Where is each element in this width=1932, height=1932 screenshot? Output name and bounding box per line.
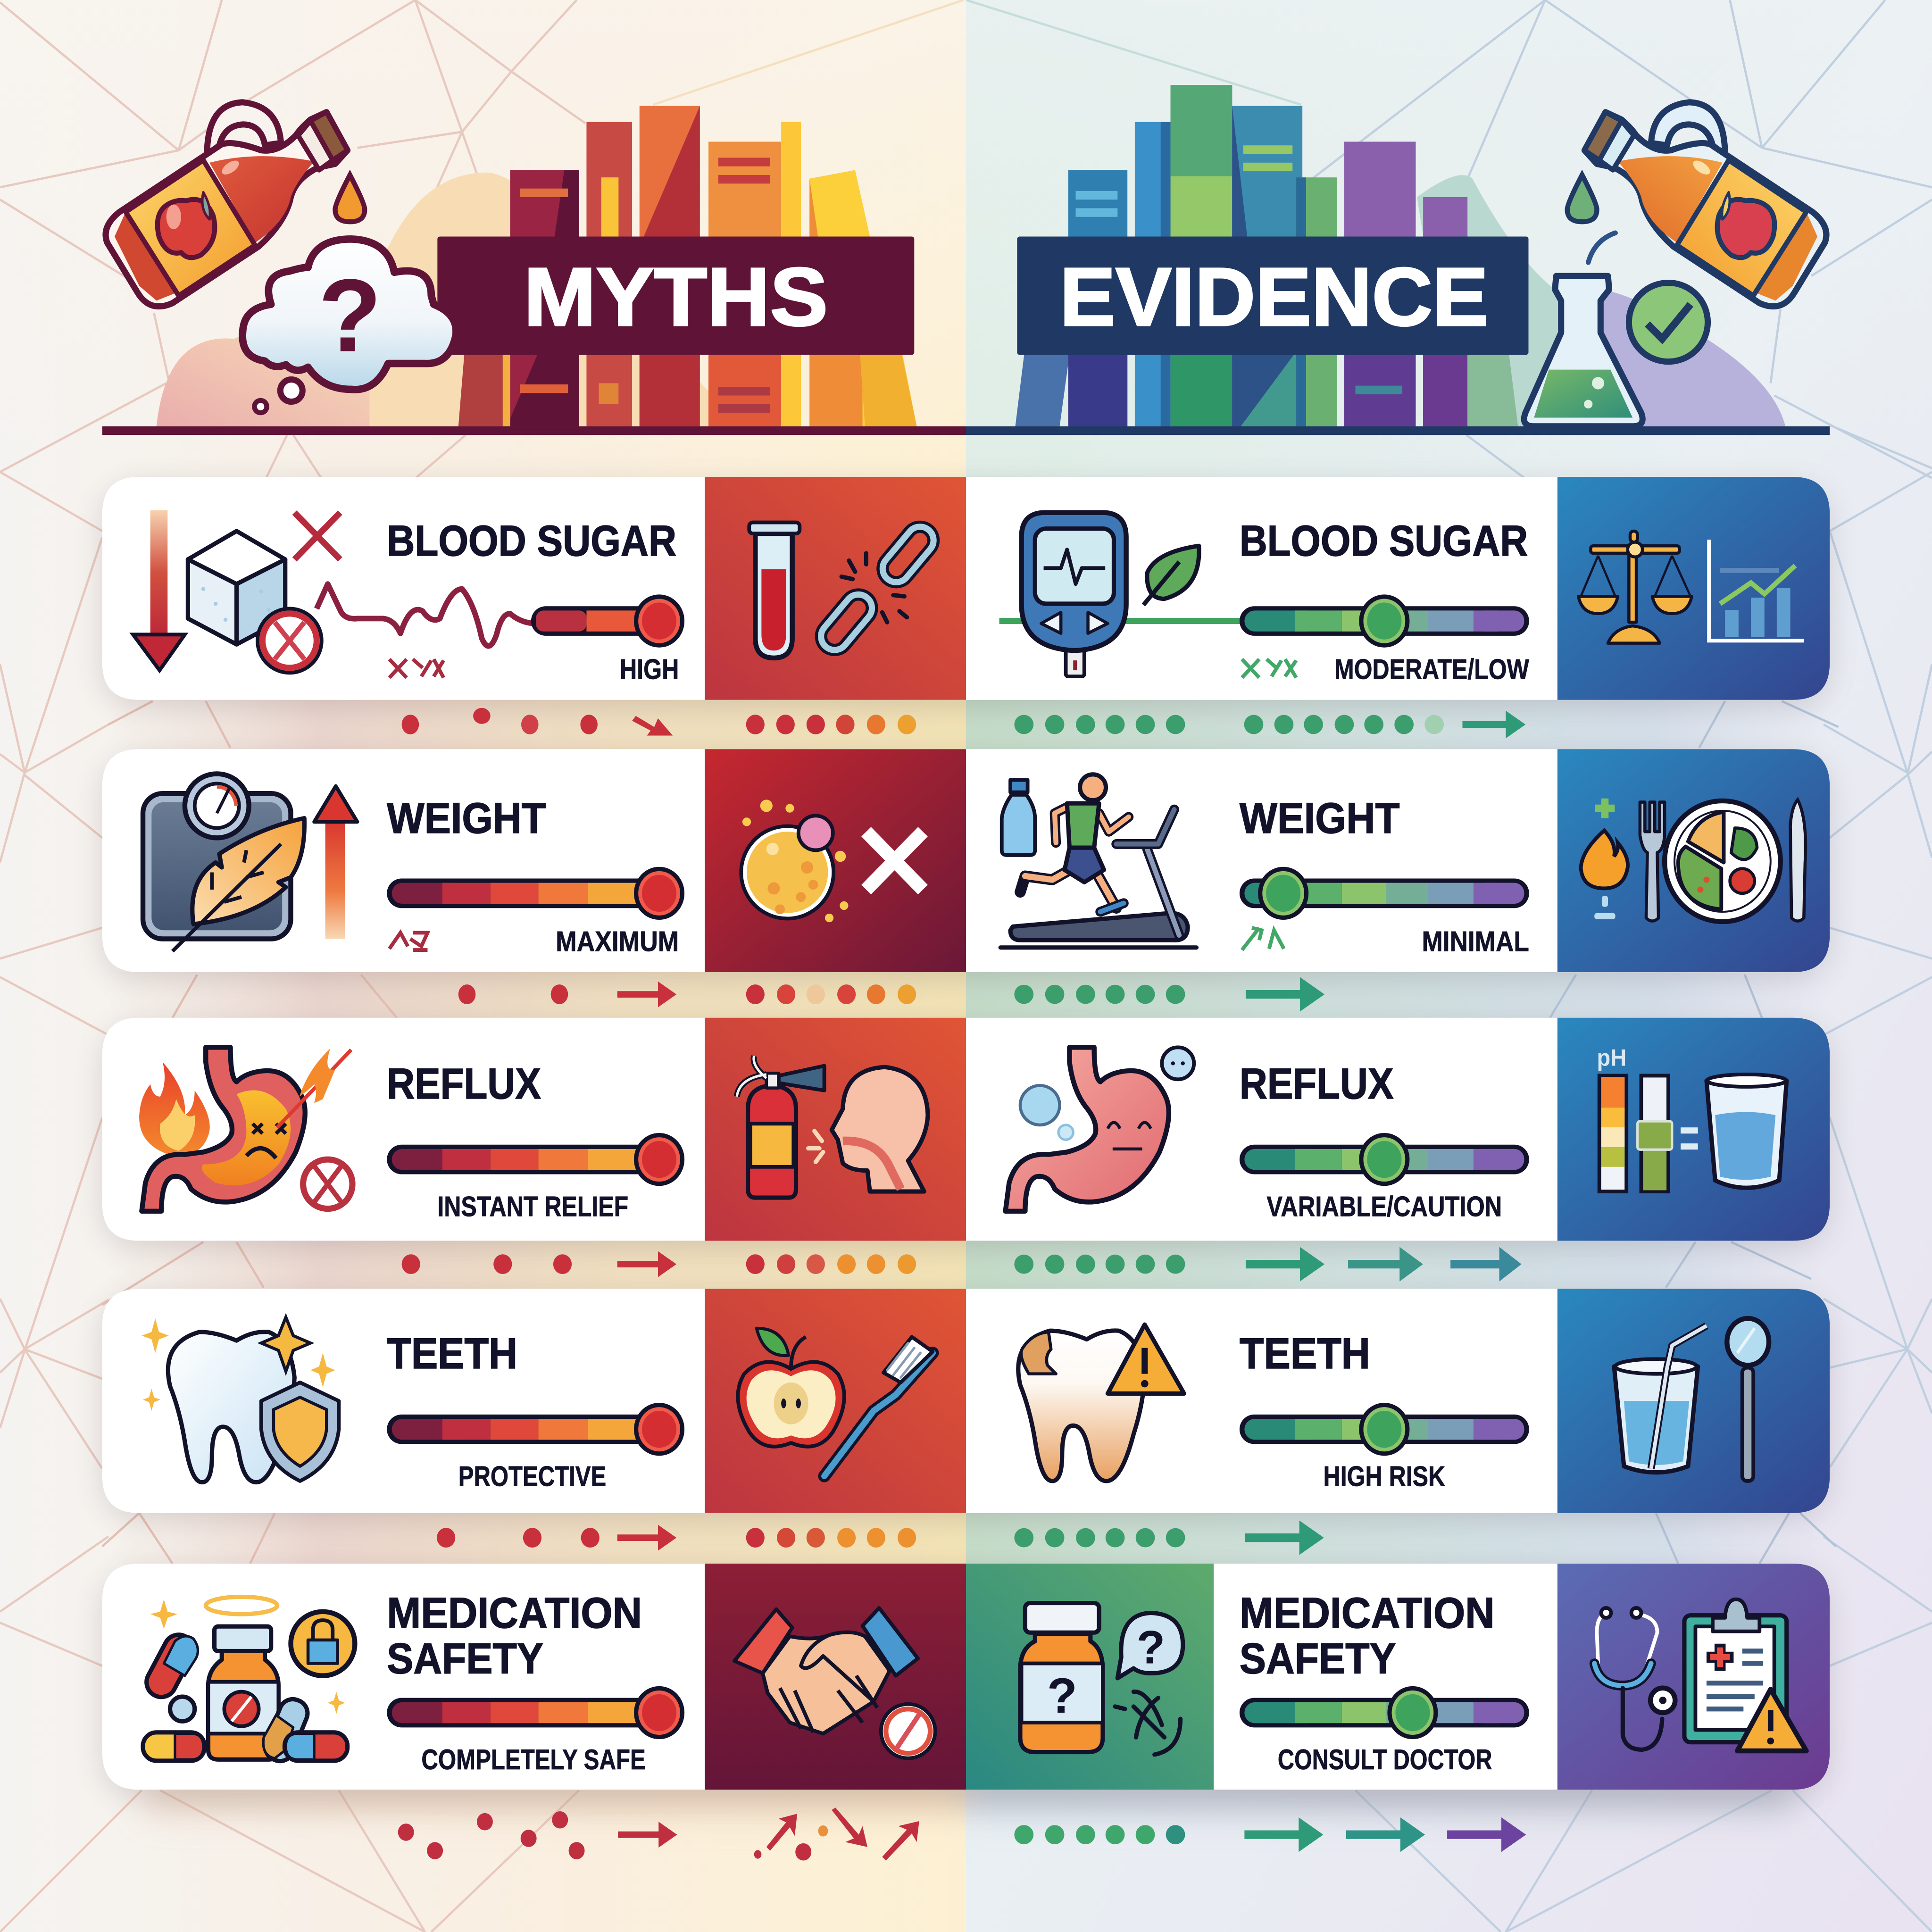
- icon: sparkling tooth: [142, 1317, 335, 1482]
- heading: [1240, 1589, 1495, 1682]
- icon: red x: [294, 513, 340, 559]
- icon: calm stomach: [1006, 1047, 1169, 1211]
- icon: flask: [1524, 276, 1642, 426]
- icon: halo: [206, 1597, 277, 1614]
- icon: sugar cube: [188, 531, 285, 644]
- network lines inside strips: [102, 701, 1838, 1564]
- icon: apple: [738, 1328, 844, 1447]
- value label: PROTECTIVE: [458, 1460, 606, 1492]
- throat: [843, 1141, 901, 1189]
- icon: speech bubble: [1162, 1047, 1194, 1079]
- icon: sparkles: [150, 1599, 345, 1714]
- strip 1 myth: dots and arrow: [402, 708, 916, 736]
- panel: evidence teeth colour: [1557, 1289, 1830, 1513]
- panel: myth weight colour: [705, 749, 966, 972]
- panel: evidence reflux colour: [1557, 1018, 1830, 1241]
- header blobs: evidence: [1417, 175, 1785, 426]
- card base: [102, 749, 1557, 972]
- icon: head profile: [832, 1067, 928, 1191]
- heading: REFLUX: [387, 1060, 541, 1108]
- icon: plus flame: [1581, 799, 1628, 919]
- card base: [102, 1018, 1557, 1241]
- strip 3 myth: dots and arrow: [402, 1251, 916, 1277]
- icon: test tube: [749, 523, 799, 658]
- icon: thought cloud question: [242, 239, 456, 413]
- icon: water bottle: [1002, 780, 1035, 855]
- value label: MINIMAL: [1422, 926, 1529, 958]
- icon: no circle: [303, 1159, 352, 1209]
- strip 3 evidence: dots and arrows: [1014, 1247, 1522, 1282]
- icon: vinegar bottle myths: [106, 102, 348, 307]
- icon: warning triangle: [1108, 1324, 1184, 1393]
- icon: glucometer: [1022, 513, 1126, 676]
- icon: leaf: [1143, 546, 1199, 605]
- icon: vinegar bottle evidence: [1584, 102, 1826, 307]
- shelf: [102, 426, 1830, 435]
- icon: lock badge: [291, 1612, 355, 1676]
- icon: down arrow: [133, 510, 185, 670]
- gauge: evidence teeth: [1240, 1403, 1529, 1456]
- small mark: [1242, 928, 1284, 950]
- icon: stethoscope: [1594, 1608, 1675, 1749]
- panel: evidence blood sugar colour: [1557, 477, 1830, 700]
- heading: SAFETY: [387, 1634, 543, 1682]
- panel: evidence medication green: [966, 1564, 1214, 1790]
- icon: drop myths: [335, 175, 365, 222]
- value label: VARIABLE/CAUTION: [1266, 1191, 1502, 1222]
- icon: check badge: [1629, 283, 1708, 362]
- strip 1 evidence: dots and arrow: [1014, 711, 1525, 738]
- icon: knife: [1790, 799, 1806, 921]
- icon: scales: [1578, 531, 1692, 643]
- panel: evidence weight colour: [1557, 749, 1830, 972]
- icon: flame right: [300, 1049, 335, 1103]
- heading: MEDICATION: [387, 1589, 642, 1637]
- strip 2 myth: dots and arrow: [458, 982, 916, 1008]
- row: reflux: [102, 1018, 1830, 1241]
- strips behind dots: [102, 700, 1830, 1564]
- icon: bar chart: [1709, 540, 1804, 641]
- icon: question bottle: [1020, 1603, 1103, 1752]
- heading: BLOOD SUGAR: [1240, 517, 1528, 565]
- heading: [387, 1589, 642, 1682]
- panel: myth medication colour: [705, 1564, 966, 1790]
- title banner: EVIDENCE: EVIDENCE: [1060, 251, 1489, 343]
- row: medication safety: [102, 1564, 1830, 1790]
- small mark: [389, 933, 427, 950]
- icon: bubbles: [1020, 1085, 1073, 1140]
- books: evidence: [1015, 85, 1518, 426]
- heading: WEIGHT: [387, 794, 546, 842]
- value label: CONSULT DOCTOR: [1278, 1744, 1492, 1775]
- panel: myth teeth colour: [705, 1289, 966, 1513]
- value label: COMPLETELY SAFE: [421, 1744, 646, 1775]
- title banner: MYTHS: MYTHS: [524, 251, 828, 343]
- icon: question speech bubble: ?: [1137, 1622, 1165, 1674]
- icon: clipboard: [1684, 1599, 1787, 1742]
- panel: myth blood sugar colour: [705, 477, 966, 700]
- icon: fork: [1640, 802, 1665, 921]
- gauge: evidence weight: [1240, 867, 1529, 920]
- gauge: evidence medication: [1240, 1686, 1529, 1739]
- icon: question speech bubble: [1117, 1613, 1183, 1678]
- icon: water glass: [1707, 1074, 1787, 1188]
- icon: no circle: [258, 608, 322, 673]
- icon: fat cell: [739, 799, 849, 922]
- row: weight: [102, 749, 1830, 972]
- strip 4 evidence: dots and arrow: [1014, 1521, 1324, 1555]
- icon: broken x: [1115, 1692, 1181, 1755]
- card base: [102, 1289, 1557, 1513]
- gauge: myth reflux: [387, 1133, 684, 1186]
- heading: REFLUX: [1240, 1060, 1393, 1108]
- small mark: [1242, 659, 1296, 678]
- value label: HIGH: [620, 653, 679, 685]
- gauge: myth teeth: [387, 1403, 684, 1456]
- question mark on bottle: ?: [1047, 1668, 1077, 1724]
- header blobs: myths: [157, 173, 739, 426]
- icon: pouring arc: [1588, 233, 1616, 262]
- gauge: myth weight: [387, 867, 684, 920]
- heading: MEDICATION: [1240, 1589, 1495, 1637]
- icon: thought cloud question: ?: [318, 258, 382, 373]
- icon: handshake: [734, 1608, 918, 1733]
- books: myths: [458, 106, 917, 426]
- panel: evidence medication purple: [1557, 1564, 1830, 1790]
- value label: MAXIMUM: [556, 926, 679, 958]
- heading: WEIGHT: [1240, 794, 1400, 842]
- strip 5 myth: scattered dots and arrows: [398, 1807, 919, 1860]
- heading: TEETH: [1240, 1330, 1370, 1378]
- value label: MODERATE/LOW: [1334, 653, 1529, 685]
- icon: drop evidence: [1567, 175, 1597, 222]
- gauge: evidence blood sugar: [1240, 594, 1529, 648]
- gauge: myth blood sugar: [531, 594, 684, 648]
- strip 4 myth: dots and arrow: [437, 1525, 916, 1551]
- row: blood sugar: [102, 477, 1830, 700]
- icon: toothbrush: [824, 1337, 933, 1476]
- icon: broken chain: [816, 521, 939, 656]
- gauge: myth medication: [387, 1686, 684, 1739]
- icon: plate: [1665, 801, 1781, 922]
- icon: shield: [261, 1382, 339, 1481]
- card shadows: [102, 484, 1830, 1798]
- strip 5 evidence: dots and arrows: [1014, 1817, 1526, 1852]
- panel: myth reflux colour: [705, 1018, 966, 1241]
- strip 2 evidence: dots and arrow: [1014, 977, 1324, 1012]
- small mark: [389, 659, 443, 678]
- icon: white x: [866, 832, 923, 890]
- icon: medicine bottle: [208, 1626, 278, 1759]
- puff marks: [808, 1131, 823, 1162]
- icon: glass with straw: [1614, 1326, 1707, 1473]
- icon: damaged tooth: [1018, 1331, 1145, 1481]
- icon: fire extinguisher: [737, 1056, 824, 1198]
- icon: squiggle line: [316, 584, 533, 646]
- icon: runner on treadmill: [1000, 774, 1196, 948]
- soft shade under last row: [148, 1774, 1791, 1811]
- icon: no symbol: [881, 1704, 935, 1758]
- title banner: MYTHS: [437, 237, 914, 355]
- icon: pH strips: [1599, 1075, 1698, 1191]
- icon: flame left: [139, 1062, 210, 1156]
- title banner: EVIDENCE: [1017, 237, 1528, 355]
- pH label: pH: [1597, 1045, 1626, 1071]
- value label: HIGH RISK: [1324, 1460, 1445, 1492]
- green link line: [999, 618, 1246, 624]
- heading: SAFETY: [1240, 1634, 1396, 1682]
- heading: TEETH: [387, 1330, 517, 1378]
- icon: burning stomach: [142, 1047, 351, 1211]
- card base: [102, 477, 1557, 700]
- icon: dental mirror: [1727, 1318, 1769, 1481]
- icon: warning triangle: [1737, 1689, 1807, 1751]
- icon: up arrow: [314, 786, 358, 939]
- card base: [102, 1564, 1557, 1790]
- heading: BLOOD SUGAR: [387, 517, 676, 565]
- gauge: evidence reflux: [1240, 1133, 1529, 1186]
- row: teeth: [102, 1289, 1830, 1513]
- value label: INSTANT RELIEF: [437, 1191, 628, 1222]
- icon: capsules and pills: [142, 1630, 348, 1765]
- icon: scale with feather: [143, 774, 304, 951]
